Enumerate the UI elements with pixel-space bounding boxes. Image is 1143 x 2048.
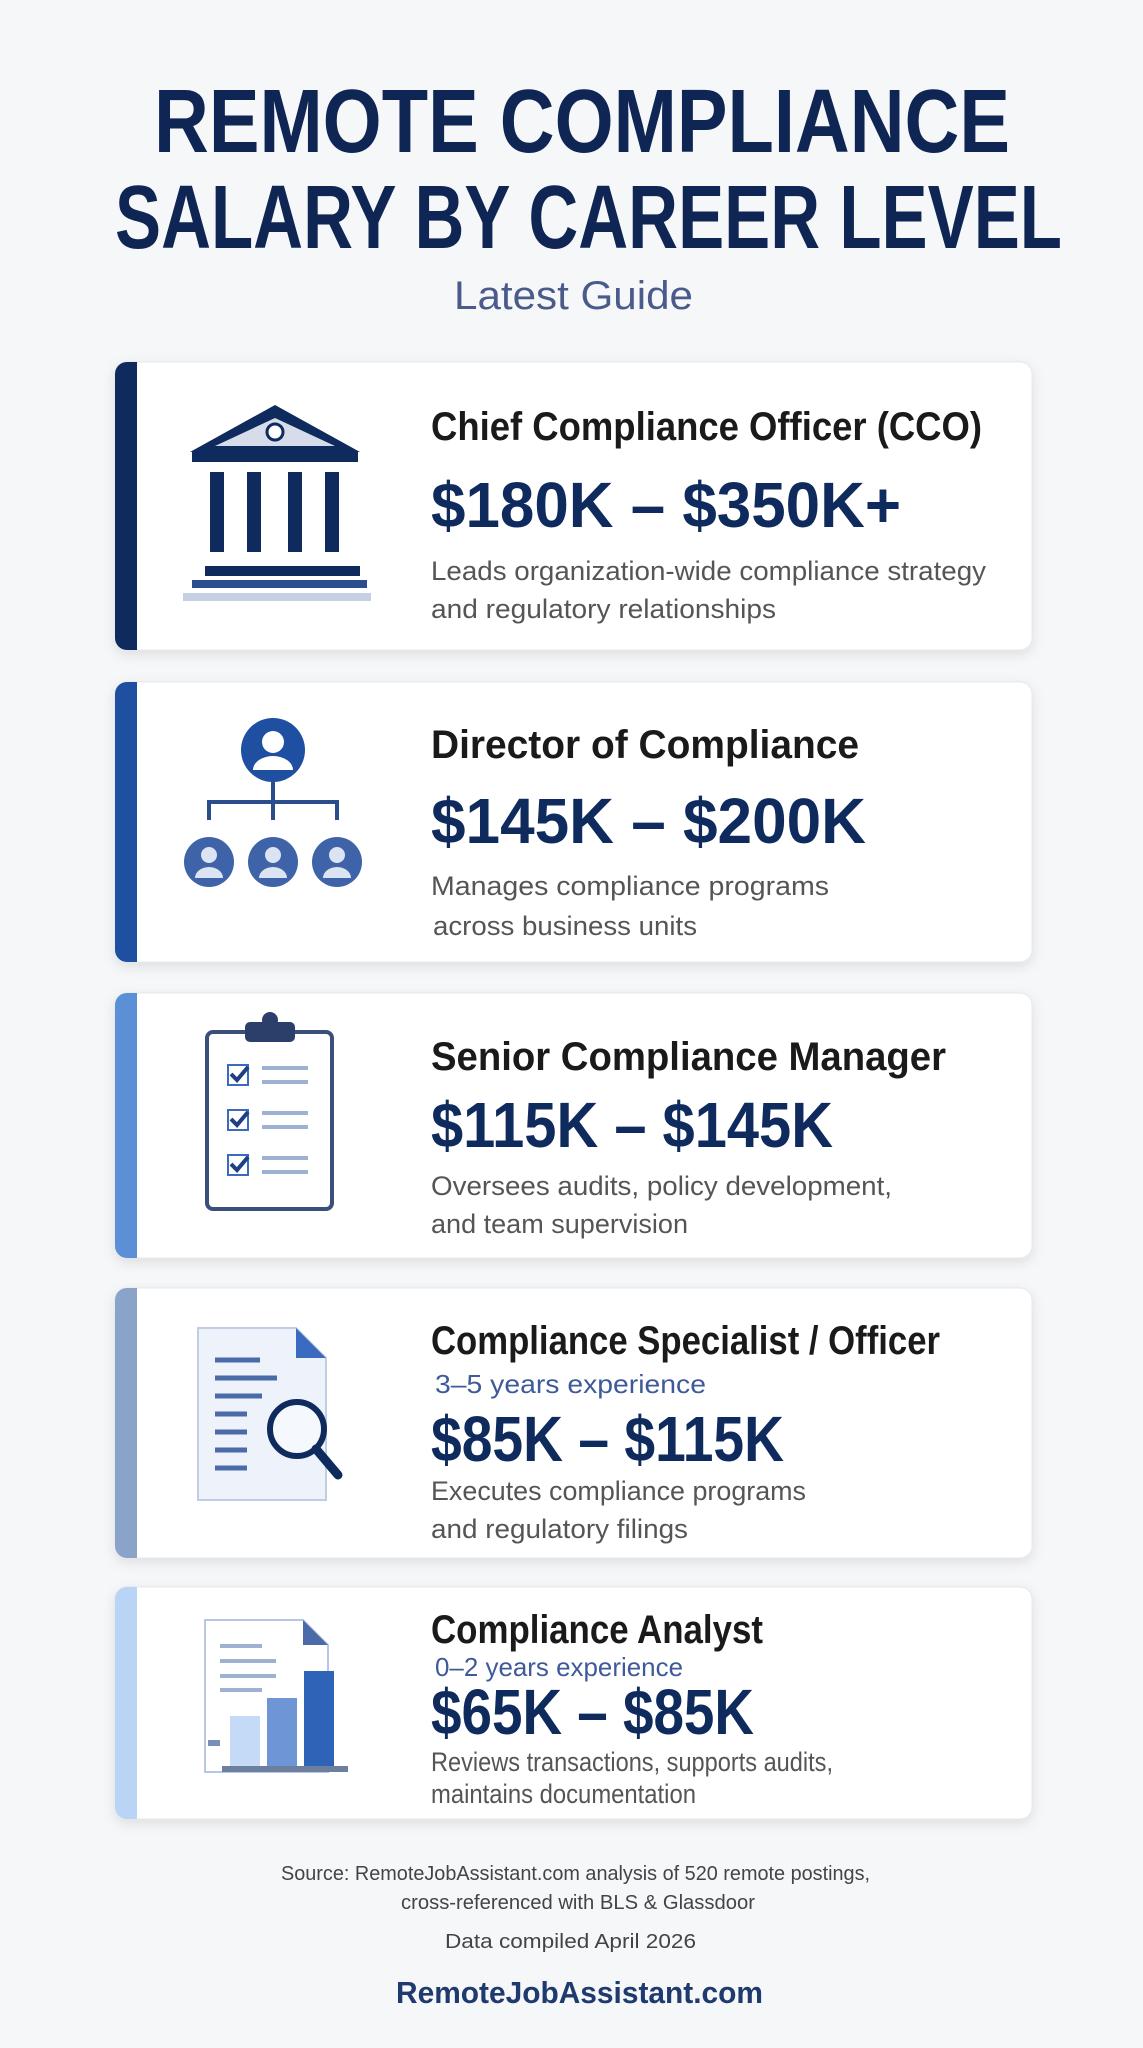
card: Senior Compliance Manager: $115K – $145K bbox=[431, 1089, 833, 1161]
card: Compliance Specialist / Officer: Compliance Specialist / Officer bbox=[431, 1319, 940, 1363]
card: Director of Compliance bbox=[115, 682, 1032, 962]
footer: source note bbox=[281, 1863, 870, 1953]
footer: website: RemoteJobAssistant.com bbox=[396, 1975, 763, 2010]
card: Senior Compliance Manager: Senior Compliance Manager bbox=[431, 1035, 946, 1079]
title bbox=[115, 72, 1062, 268]
footer: source note: Data compiled April 2026 bbox=[445, 1931, 696, 1953]
card: Senior Compliance Manager: and team supervision bbox=[431, 1209, 688, 1239]
card: Director of Compliance: $145K – $200K bbox=[431, 785, 866, 857]
icon: clipboard checklist bbox=[207, 1012, 332, 1209]
footer: source note: Source: RemoteJobAssistant.com analysis of 520 remote postings, bbox=[281, 1863, 870, 1885]
card: Chief Compliance Officer bbox=[115, 362, 1032, 650]
icon: document with magnifier bbox=[198, 1328, 338, 1500]
card: Compliance Analyst bbox=[115, 1587, 1032, 1819]
card: Compliance Analyst: maintains documentation bbox=[431, 1779, 696, 1809]
card: Chief Compliance Officer: and regulatory relationships bbox=[431, 594, 776, 624]
card: Director of Compliance: across business units bbox=[433, 911, 697, 941]
card: Compliance Analyst: 0–2 years experience bbox=[435, 1652, 683, 1682]
card: Senior Compliance Manager: Oversees audits, policy development, bbox=[431, 1171, 892, 1201]
subtitle: Latest Guide bbox=[454, 274, 693, 318]
card: Director of Compliance: Manages compliance programs bbox=[431, 871, 829, 901]
card: Chief Compliance Officer: Chief Compliance Officer (CCO) bbox=[431, 405, 982, 449]
card: Compliance Analyst: $65K – $85K bbox=[431, 1676, 754, 1748]
card: Compliance Specialist / Officer: Executes compliance programs bbox=[431, 1476, 806, 1506]
footer: source note: cross-referenced with BLS & Glassdoor bbox=[401, 1892, 755, 1914]
card: Compliance Specialist / Officer bbox=[115, 1288, 1032, 1558]
card: Compliance Specialist / Officer: and regulatory filings bbox=[431, 1514, 688, 1544]
card: Senior Compliance Manager bbox=[115, 993, 1032, 1258]
icon: bank building bbox=[183, 405, 371, 601]
card: Compliance Analyst: Compliance Analyst bbox=[431, 1608, 763, 1652]
card: Chief Compliance Officer: Leads organization-wide compliance strategy bbox=[431, 556, 987, 586]
card: Chief Compliance Officer: $180K – $350K+ bbox=[431, 469, 901, 541]
card: Compliance Specialist / Officer: $85K – $115K bbox=[431, 1403, 784, 1475]
card: Compliance Analyst: Reviews transactions, supports audits, bbox=[431, 1747, 833, 1777]
card: Director of Compliance: Director of Compliance bbox=[431, 723, 859, 767]
icon: org chart bbox=[184, 718, 362, 887]
title: REMOTE COMPLIANCE bbox=[154, 72, 1010, 172]
icon: report with bar chart bbox=[205, 1620, 348, 1772]
card: Compliance Specialist / Officer: 3–5 years experience bbox=[435, 1369, 706, 1399]
